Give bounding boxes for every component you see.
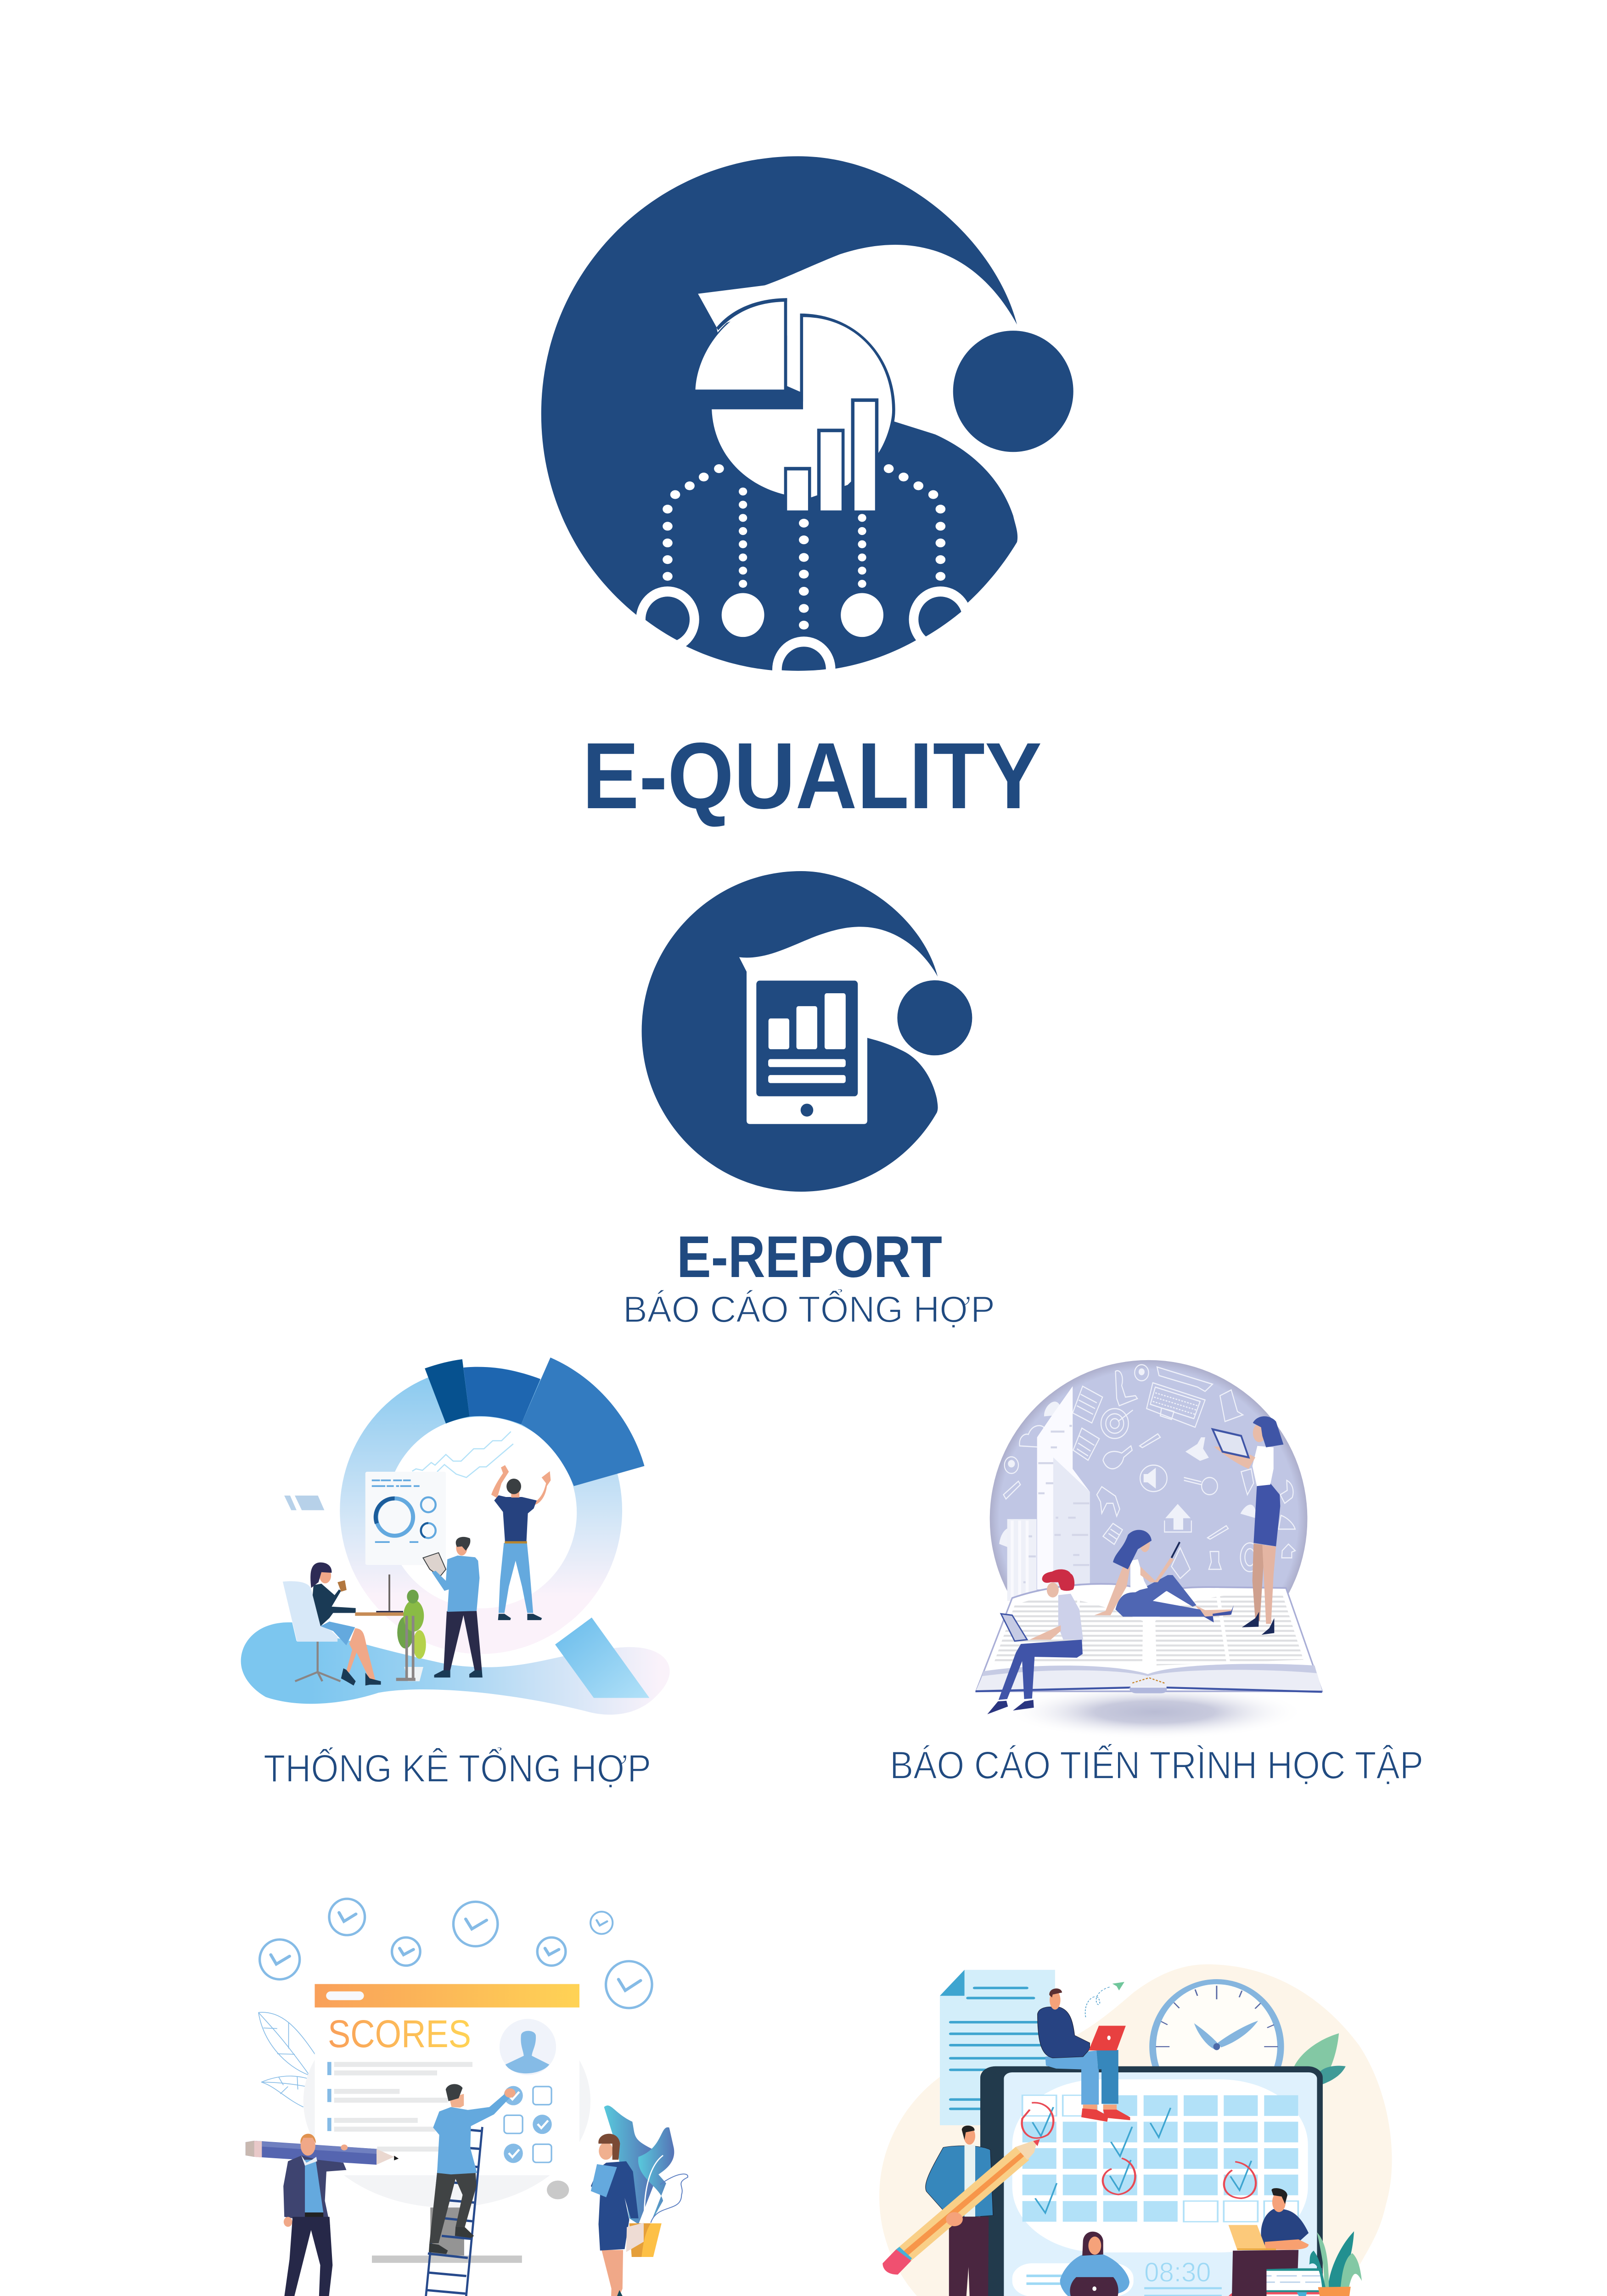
cream blob — [879, 1964, 1392, 2296]
ring gap — [554, 1612, 607, 1661]
small satellite circle — [897, 980, 972, 1055]
magnifier handle — [555, 1617, 649, 1698]
illustration: teaching calendar — [879, 1964, 1392, 2296]
illustration: open book learning — [976, 1360, 1322, 1739]
tablet screen — [1004, 2072, 1317, 2296]
dotted connector lines — [663, 464, 945, 630]
man on ladder — [429, 2084, 516, 2254]
stack of books — [1226, 2268, 1322, 2296]
document sheet — [940, 1970, 1055, 2125]
seated woman with laptop — [987, 1569, 1083, 1714]
illustration: score sheet — [246, 1899, 688, 2296]
small satellite circle — [953, 331, 1073, 452]
caption: THỐNG KÊ TỔNG HỢP — [264, 1747, 651, 1790]
potted plant — [1309, 2231, 1362, 2296]
man with giant pencil — [882, 2126, 1040, 2296]
logo: E-QUALITY emblem — [541, 156, 1073, 703]
title: E-QUALITY: E-QUALITY — [582, 723, 1042, 828]
line-art leaves — [258, 2012, 315, 2107]
dome background — [990, 1360, 1308, 1593]
city towers — [1007, 1386, 1090, 1601]
clock badges — [260, 1899, 652, 2008]
floating tags — [284, 1496, 324, 1510]
ring wedge mid — [463, 1367, 540, 1424]
desk with monitor — [355, 1575, 420, 1616]
illustration: statistics magnifier — [241, 1357, 670, 1715]
ground blob — [241, 1622, 670, 1715]
monitor stand — [372, 2181, 569, 2263]
calendar grid — [1023, 2095, 1298, 2222]
caption: BÁO CÁO TIẾN TRÌNH HỌC TẬP — [890, 1744, 1423, 1787]
score panel — [315, 1984, 579, 2175]
dashboard panel — [365, 1472, 446, 1565]
avatar — [500, 2019, 556, 2075]
man with pencil — [246, 2134, 399, 2296]
leaves behind tablet — [1293, 2033, 1346, 2084]
wall clock — [1153, 1981, 1281, 2112]
education line icons — [1000, 1365, 1295, 1579]
woman cross-legged with laptop — [1050, 2232, 1137, 2296]
seated man with laptop — [1228, 2188, 1309, 2296]
header bar — [315, 1984, 579, 2008]
standing woman with tablet — [1213, 1416, 1283, 1635]
man with raised arms — [491, 1465, 551, 1620]
grey backdrop — [303, 1995, 590, 2207]
line chart — [412, 1432, 513, 1478]
SCORES heading: SCORES — [328, 2012, 471, 2055]
man on top with laptop — [1038, 1988, 1130, 2122]
ring wedge light — [521, 1357, 645, 1486]
ring wedge dark — [425, 1359, 470, 1424]
pie chart — [694, 283, 895, 497]
subheading: BÁO CÁO TỔNG HỢP — [623, 1289, 995, 1330]
woman at desk — [283, 1562, 381, 1686]
open book — [976, 1584, 1322, 1694]
seated woman with phone — [1094, 1530, 1234, 1622]
emblem body — [541, 156, 1017, 672]
network nodes — [636, 586, 968, 672]
red circles — [1022, 2103, 1256, 2198]
checkboxes — [504, 2086, 552, 2163]
tablet report icon — [756, 980, 858, 1117]
floor shadow — [1006, 1685, 1304, 1739]
decorative plant — [604, 2105, 688, 2257]
woman with folder — [591, 2134, 644, 2296]
logo: E-REPORT emblem — [642, 871, 972, 1192]
heading: E-REPORT: E-REPORT — [677, 1224, 942, 1290]
score rows — [327, 2062, 472, 2151]
time label: 08:30 — [1144, 2257, 1211, 2287]
magnifier ring — [340, 1367, 622, 1654]
tablet frame — [980, 2066, 1323, 2296]
ladder — [424, 2127, 482, 2296]
check marks — [1033, 2107, 1251, 2213]
man with clipboard — [423, 1537, 483, 1677]
bar chart — [784, 399, 878, 515]
paper plane — [1085, 1982, 1124, 2017]
emblem body — [642, 871, 938, 1192]
potted plant — [396, 1590, 426, 1681]
